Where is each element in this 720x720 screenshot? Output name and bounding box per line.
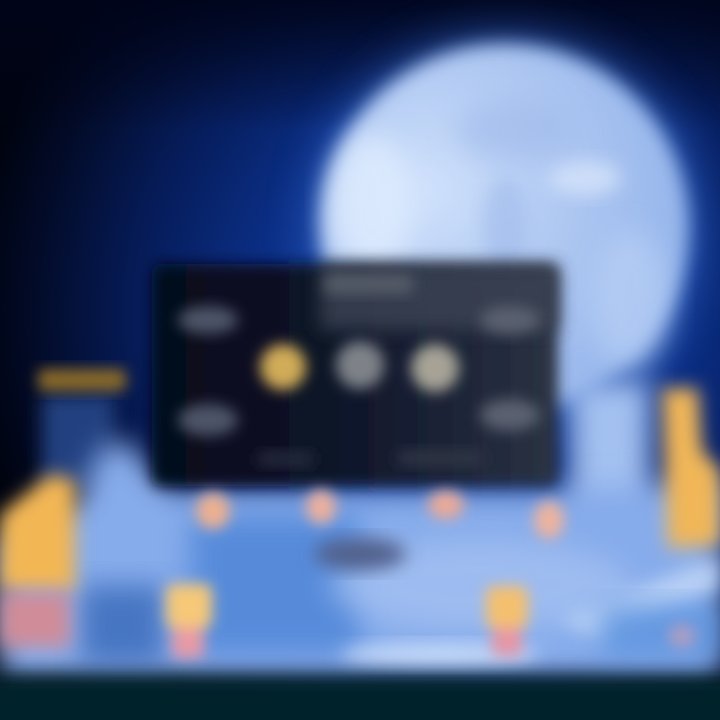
top right pill (480, 306, 540, 334)
lower landscape (0, 438, 720, 680)
right gold building (662, 388, 720, 548)
small lantern 3 (428, 491, 464, 519)
moon glow (310, 33, 700, 423)
left tower (42, 395, 114, 490)
top sky shading (0, 0, 720, 130)
grey circle (336, 341, 384, 389)
dark foreground strip (0, 676, 720, 720)
dark info panel (152, 264, 558, 486)
small lantern 1 (196, 493, 230, 529)
left gold building (0, 474, 75, 647)
panel title (325, 274, 413, 294)
moon (321, 44, 689, 412)
bottom captions (258, 452, 313, 466)
panel header band (320, 265, 558, 330)
small pink marker right (668, 624, 696, 648)
top left pill (178, 306, 238, 334)
large lantern left (166, 584, 212, 658)
orange sign (38, 369, 126, 391)
light column beneath moon (570, 380, 650, 530)
small lantern 4 (534, 501, 564, 539)
gold circle (260, 344, 306, 390)
pale circle (411, 344, 459, 392)
bottom right pill (480, 399, 540, 431)
dark central ellipse (314, 538, 406, 570)
large lantern right (486, 586, 528, 656)
small lantern 2 (306, 490, 336, 524)
bottom left pill (178, 404, 238, 436)
